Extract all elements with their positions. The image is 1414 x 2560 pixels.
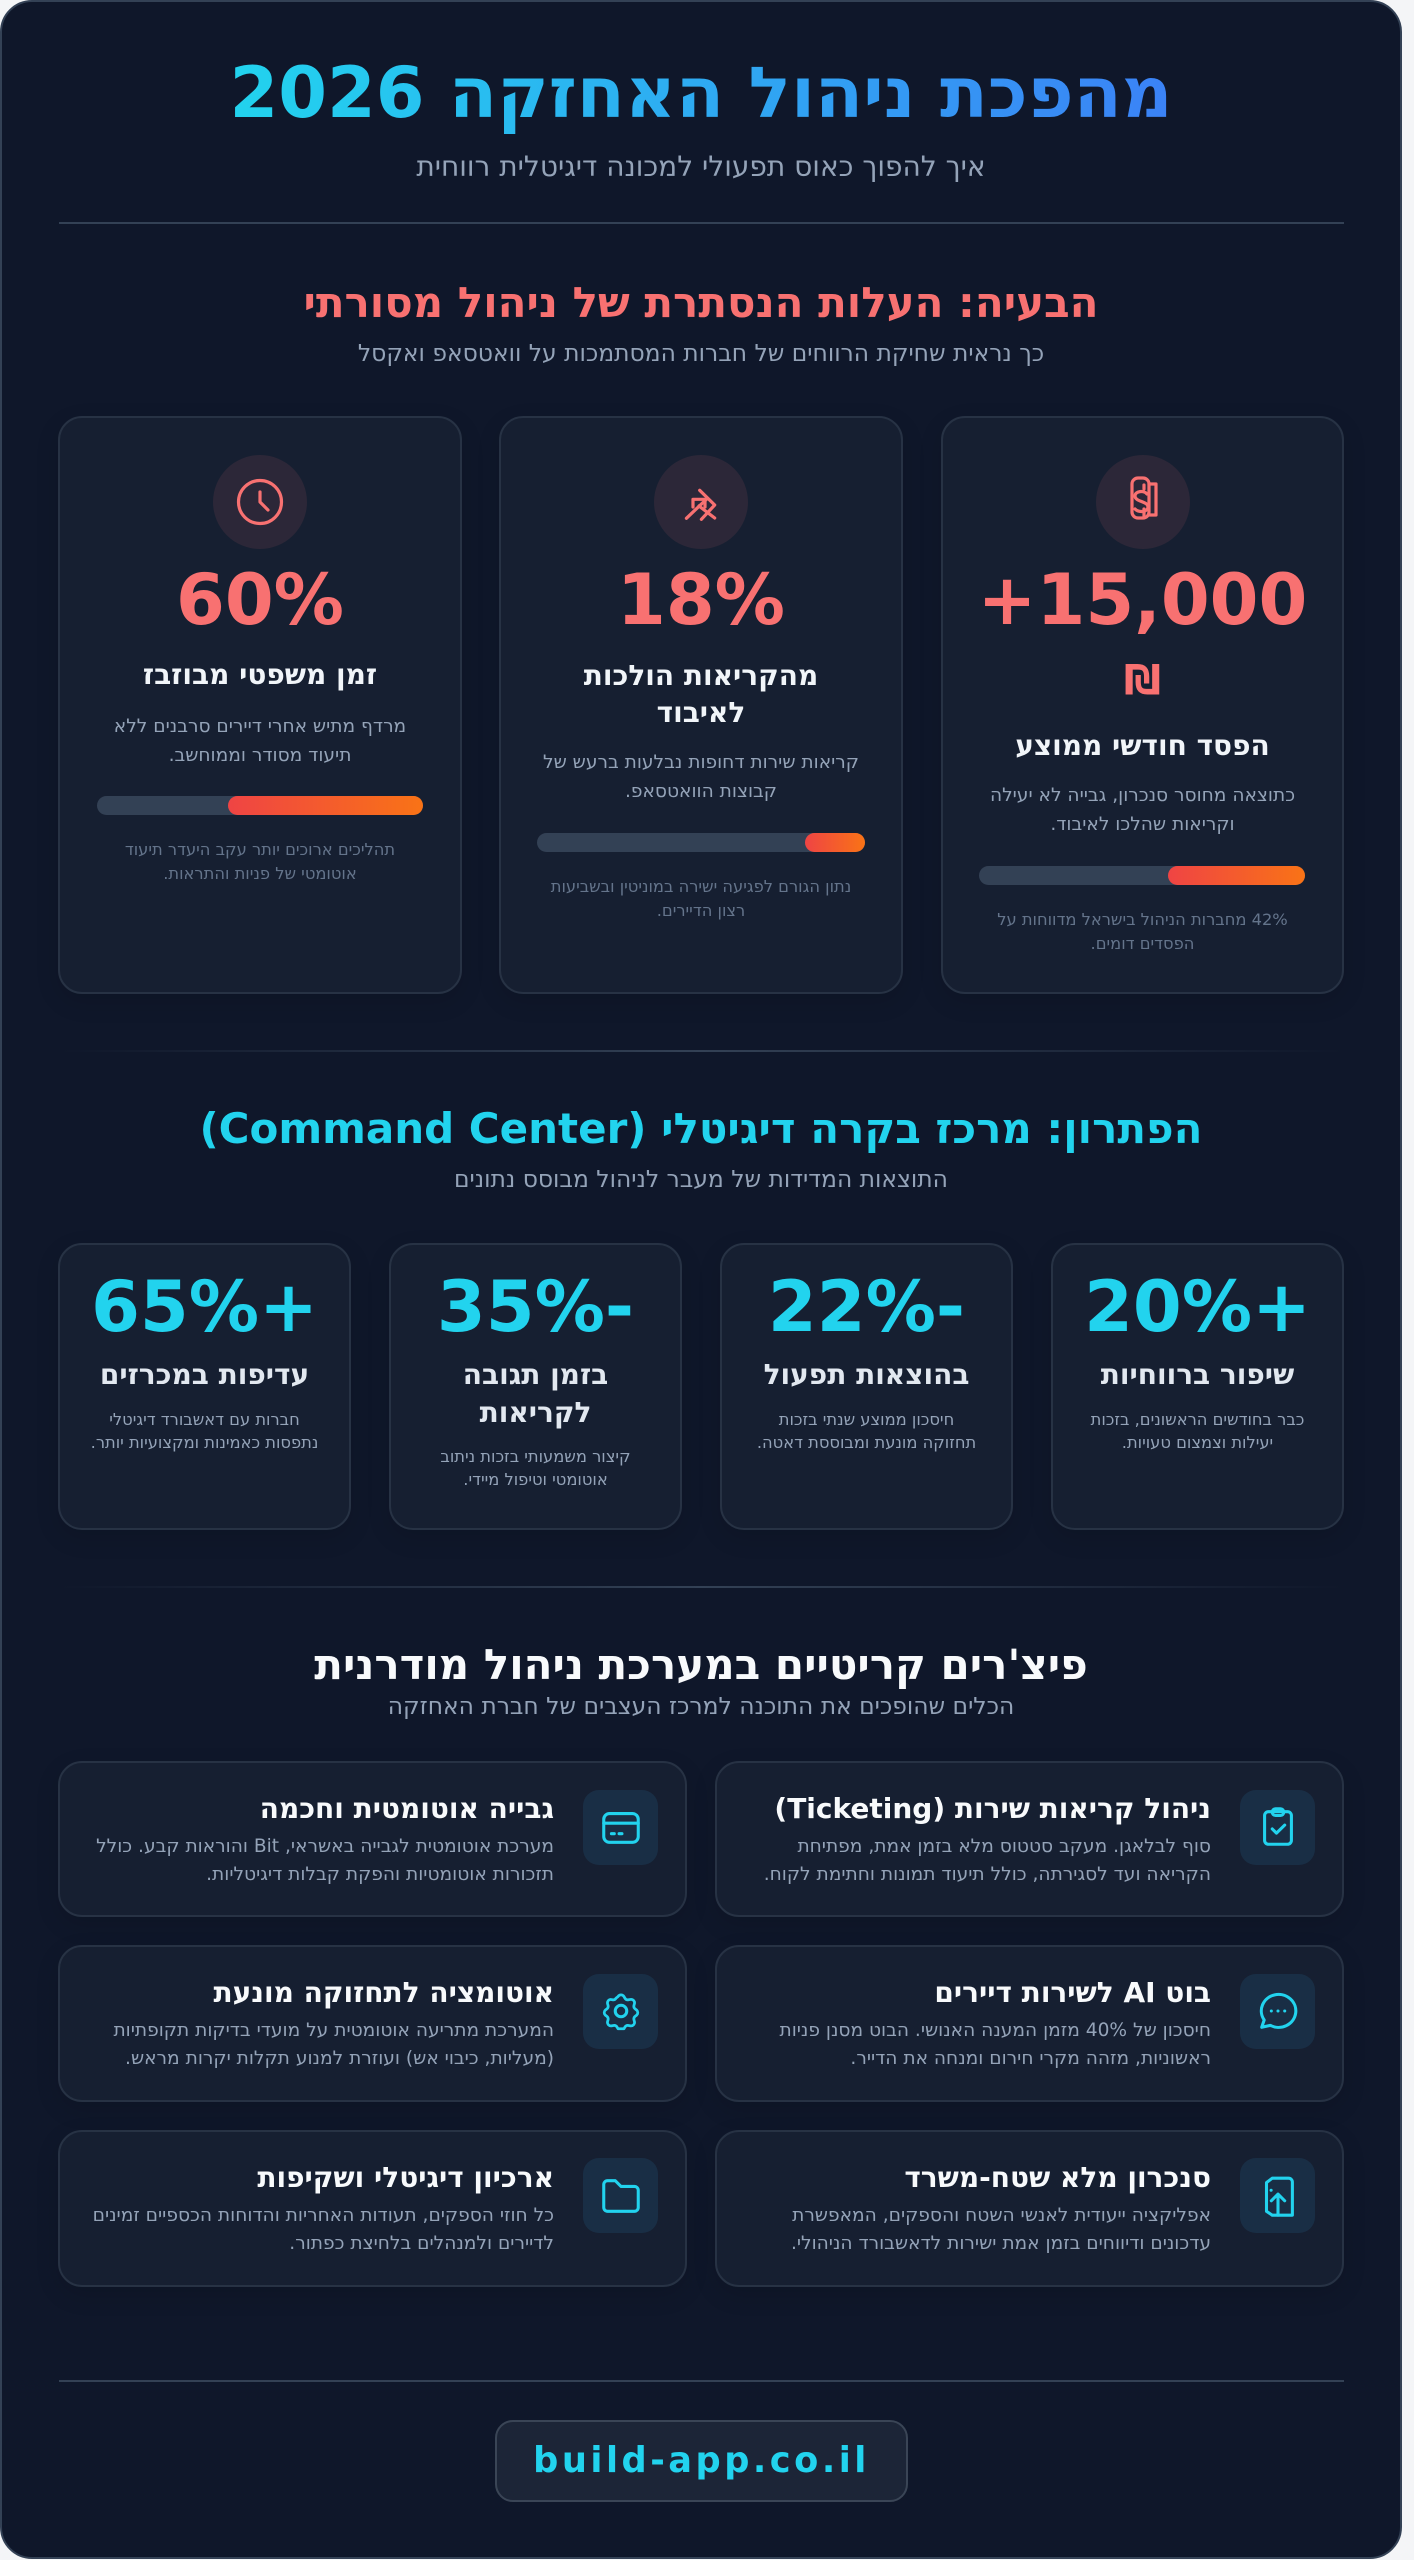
icon: clock: [213, 455, 307, 549]
panel: response time: [389, 1243, 682, 1530]
feature: ticketing: [715, 1761, 1344, 1917]
description: [543, 752, 859, 802]
footnote: רצון הדיירים.: [657, 900, 745, 920]
footer link button: build-app.co.il: [533, 2440, 870, 2481]
icon: broken wrench: [654, 455, 748, 549]
footnote: [550, 877, 851, 920]
description: קריאות שירות דחופות נבלעות ברעש של: [543, 752, 859, 773]
description: קיצור משמעותי בזכות ניתוב: [440, 1447, 631, 1466]
feature title: גבייה אוטומטית וחכמה: [260, 1792, 554, 1825]
feature description: [764, 1836, 1211, 1885]
panel: operating costs: [720, 1243, 1013, 1530]
footnote: תהליכים ארוכים יותר עקב היעדר תיעוד: [125, 840, 395, 859]
description: [757, 1410, 976, 1452]
stat label: זמן משפטי מבוזבז: [143, 658, 377, 691]
feature description: [96, 1836, 554, 1885]
stat: -22%: -22%: [768, 1266, 965, 1348]
header divider: [59, 222, 1344, 224]
subheading: problem section: כך נראית שחיקת הרווחים של חברות המסתמכות על וואטסאפ ואקסל: [358, 339, 1044, 367]
feature title: סנכרון מלא שטח-משרד: [904, 2160, 1211, 2194]
description: תיעוד מסודר וממוחשב.: [169, 745, 351, 766]
description: מרדף מתיש אחרי דיירים סרבנים ללא: [114, 716, 406, 737]
stat label: [463, 1358, 608, 1429]
stat label: לאיבוד: [657, 696, 745, 729]
feature description: עדכונים ודיווחים בזמן אמת ישירות לדאשבורד הניהולי.: [791, 2232, 1211, 2254]
feature description: [791, 2204, 1211, 2254]
feature description: כל חוזי הספקים, תעודות האחריות והדוחות הכספיים זמינים: [93, 2204, 554, 2226]
feature: AI bot: [715, 1945, 1344, 2102]
heading: solution section: הפתרון: מרכז בקרה דיגיטלי (Command Center): [199, 1104, 1203, 1153]
icon: mobile upload: [1240, 2158, 1315, 2233]
feature description: סוף לבלאגן. מעקב סטטוס מלא בזמן אמת, מפתיחת: [797, 1836, 1211, 1857]
description: וקריאות שהלכו לאיבוד.: [1050, 814, 1235, 835]
feature: digital archive: [58, 2130, 687, 2286]
footer divider: [59, 2380, 1344, 2382]
progress bar 42%: [979, 866, 1305, 885]
subheading: solution section: התוצאות המדידות של מעבר לניהול מבוסס נתונים: [454, 1165, 948, 1193]
stat label: שיפור ברווחיות: [1101, 1358, 1294, 1391]
icon: credit card: [583, 1790, 658, 1864]
feature description: [779, 2020, 1211, 2069]
feature description: לדיירים ולמנהלים בלחיצת כפתור.: [289, 2232, 554, 2254]
feature description: מערכת אוטומטית לגבייה באשראי, Bit והוראות קבע. כולל: [96, 1836, 554, 1857]
description: [440, 1447, 631, 1489]
feature description: המערכת מתריעה אוטומטית על מועדי בדיקות תקופתיות: [113, 2020, 554, 2041]
panel: profitability: [1051, 1243, 1344, 1530]
progress bar 60%: [97, 796, 423, 815]
subtitle: איך להפוך כאוס תפעולי למכונה דיגיטלית רווחית: [416, 150, 986, 183]
stat: loss amount: +15,000: [978, 559, 1307, 641]
stat label: [584, 659, 818, 729]
icon: clipboard check: [1240, 1790, 1315, 1864]
description: נתפסות כאמינות ומקצועיות יותר.: [91, 1433, 318, 1452]
footnote: [997, 910, 1288, 952]
icon: gear: [583, 1974, 658, 2048]
description: יעילות וצמצום טעויות.: [1122, 1433, 1273, 1452]
description: [990, 785, 1295, 835]
description: [114, 716, 406, 766]
footnote: הפסדים דומים.: [1091, 934, 1194, 952]
feature description: אפליקציה ייעודית לאנשי השטח והספקים, המאפשרת: [792, 2204, 1211, 2226]
stat label: מהקריאות הולכות: [584, 659, 818, 692]
description: כבר בחודשים הראשונים, בזכות: [1091, 1410, 1304, 1429]
stat label: לקריאות: [480, 1396, 591, 1429]
panel: wasted legal time: [58, 416, 462, 994]
footnote: אוטומטי של פניות והתראות.: [163, 864, 357, 882]
feature title: בוט AI לשירות דיירים: [934, 1976, 1211, 2009]
progress bar 18%: [537, 833, 865, 852]
stat: shekel sign: ₪: [1124, 656, 1161, 704]
description: אוטומטי וטיפול מיידי.: [463, 1470, 608, 1489]
stat label: בזמן תגובה: [463, 1358, 608, 1391]
feature description: [113, 2020, 554, 2069]
icon: money: [1096, 455, 1190, 549]
stat label: הפסד חודשי ממוצע: [1015, 729, 1270, 762]
feature: field-office sync: [715, 2130, 1344, 2286]
panel: lost calls: [499, 416, 903, 994]
icon: folder: [583, 2158, 658, 2233]
description: חיסכון ממוצע שנתי בזכות: [779, 1410, 954, 1429]
stat: +65%: +65%: [91, 1266, 318, 1348]
icon: chat bubble: [1240, 1974, 1315, 2048]
description: [91, 1410, 318, 1452]
stat: +20%: +20%: [1084, 1266, 1311, 1348]
feature description: (מעליות, כיבוי אש) ועוזרת למנוע תקלות יקרות מראש.: [125, 2048, 554, 2069]
feature title: אוטומציה לתחזוקה מונעת: [214, 1976, 554, 2009]
description: תחזוקה מונעת ומבוססת דאטה.: [757, 1433, 976, 1452]
heading: problem section: הבעיה: העלות הנסתרת של ניהול מסורתי: [303, 278, 1099, 327]
stat: 18%: 18%: [617, 559, 785, 641]
heading: features section: פיצ'רים קריטיים במערכת ניהול מודרנית: [314, 1640, 1088, 1689]
footnote: נתון הגורם לפגיעה ישירה במוניטין ובשביעות: [551, 877, 851, 896]
stat label: בהוצאות תפעול: [764, 1358, 969, 1391]
panel: monthly loss: [941, 416, 1344, 994]
feature: automatic billing: [58, 1761, 687, 1917]
feature description: תזכורות אוטומטיות והפקת קבלות דיגיטליות.: [206, 1864, 554, 1885]
footnote: [125, 840, 395, 882]
footer link button: [495, 2420, 908, 2502]
subheading: features section: הכלים שהופכים את התוכנה למרכז העצבים של חברת האחזקה: [388, 1692, 1014, 1720]
feature description: ראשוניות, מזהה מקרי חירום ומנחה את הדייר.: [850, 2048, 1211, 2069]
description: [1090, 1410, 1304, 1452]
description: חברות עם דאשבורד דיגיטלי: [109, 1410, 300, 1429]
feature: preventive maintenance: [58, 1945, 687, 2102]
feature description: [93, 2204, 554, 2254]
feature title: ניהול קריאות שירות (Ticketing): [774, 1792, 1211, 1825]
feature description: חיסכון של 40% מזמן המענה האנושי. הבוט מסנן פניות: [779, 2020, 1211, 2041]
title: מהפכת ניהול האחזקה 2026: [229, 52, 1173, 134]
description: כתוצאה מחוסר סנכרון, גבייה לא יעילה: [990, 785, 1295, 806]
feature description: הקריאה ועד לסגירתה, כולל תיעוד תמונות וחתימת לקוח.: [764, 1864, 1211, 1885]
panel: tender preference: [58, 1243, 351, 1530]
stat label: עדיפות במכרזים: [100, 1358, 309, 1391]
section divider: [59, 1050, 1344, 1052]
stat: 60%: 60%: [176, 559, 344, 641]
description: קבוצות הוואטסאפ.: [625, 781, 777, 802]
feature title: ארכיון דיגיטלי ושקיפות: [257, 2160, 554, 2194]
footnote: 42% מחברות הניהול בישראל מדווחות על: [997, 910, 1288, 929]
stat: -35%: -35%: [437, 1266, 634, 1348]
section divider: [59, 1586, 1344, 1588]
